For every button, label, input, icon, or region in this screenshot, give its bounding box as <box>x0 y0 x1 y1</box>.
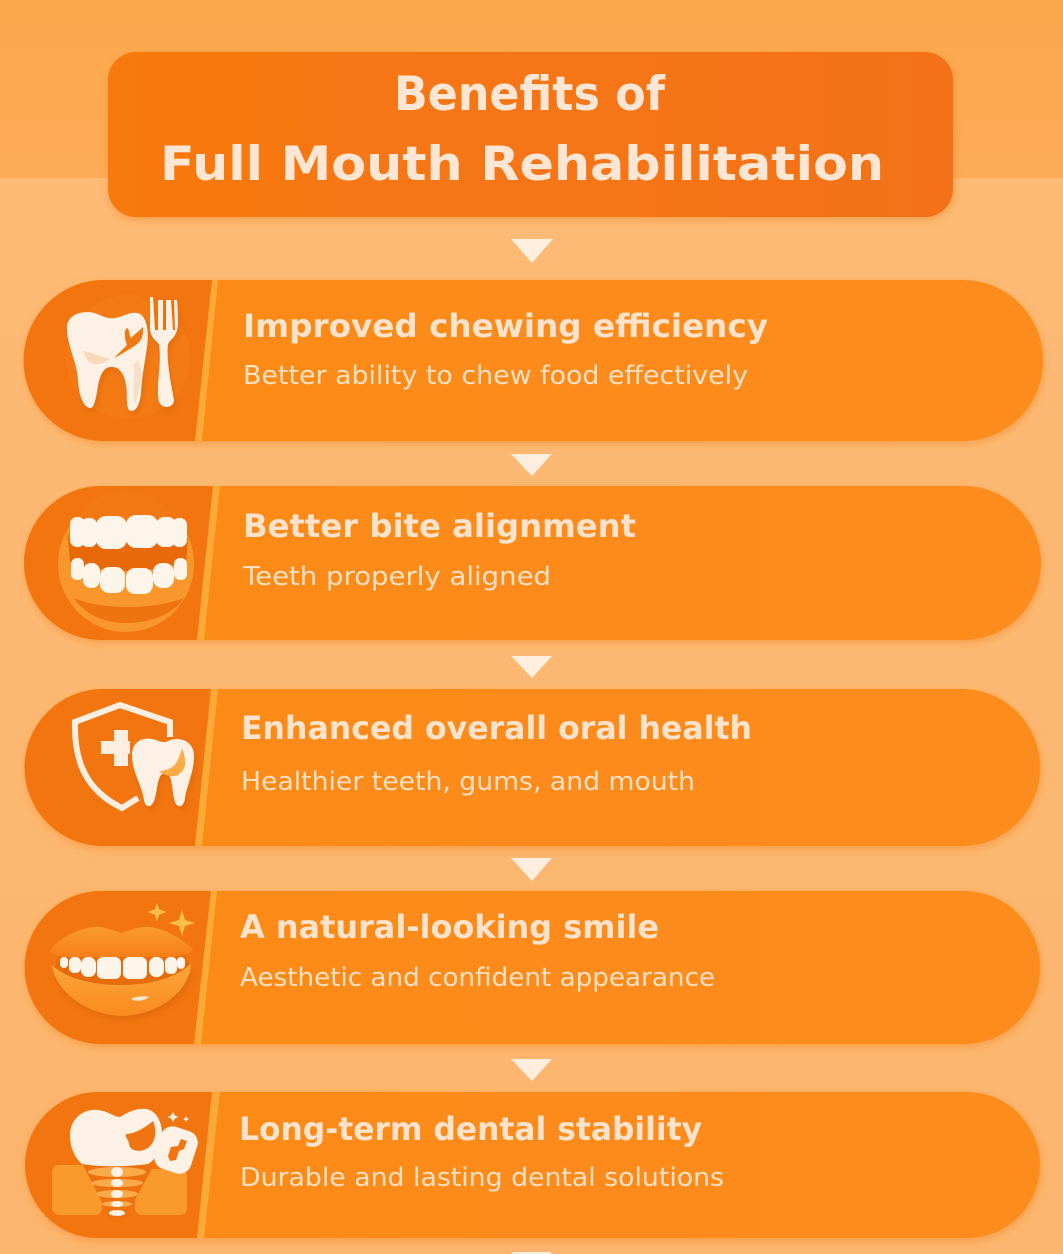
panel: better bite alignment <box>24 486 1041 640</box>
arrow: card 3 to card 4 <box>511 858 552 881</box>
heading: Enhanced overall oral health <box>241 709 752 747</box>
arrow: card 2 to card 3 <box>511 656 552 678</box>
heading: Improved chewing efficiency <box>243 307 768 345</box>
panel: a natural-looking smile <box>25 891 1040 1044</box>
arrow: clipped at bottom edge <box>511 1252 552 1254</box>
arrow: card 1 to card 2 <box>511 454 552 476</box>
description: Better ability to chew food effectively <box>243 361 748 391</box>
icon: dental implant <box>52 1109 201 1218</box>
description: Teeth properly aligned <box>242 562 551 592</box>
icon: teeth bite <box>58 491 194 632</box>
icon: shield and tooth <box>75 705 194 808</box>
panel: improved chewing efficiency <box>23 280 1043 441</box>
arrow: card 4 to card 5 <box>511 1059 552 1081</box>
icon: tooth and fork <box>66 295 190 419</box>
arrow: title to card 1 <box>511 239 553 263</box>
description: Durable and lasting dental solutions <box>240 1163 724 1193</box>
heading: Better bite alignment <box>243 507 636 545</box>
heading: A natural-looking smile <box>240 908 659 946</box>
title banner: Full Mouth Rehabilitation <box>160 137 884 192</box>
panel: enhanced overall oral health <box>25 689 1040 846</box>
heading: Long-term dental stability <box>239 1110 702 1148</box>
panel: long-term dental stability <box>25 1092 1040 1238</box>
title banner <box>108 52 953 217</box>
description: Aesthetic and confident appearance <box>240 963 715 993</box>
icon: smiling lips with sparkles <box>50 903 195 1016</box>
description: Healthier teeth, gums, and mouth <box>241 767 695 797</box>
title banner: Benefits of <box>394 67 666 122</box>
